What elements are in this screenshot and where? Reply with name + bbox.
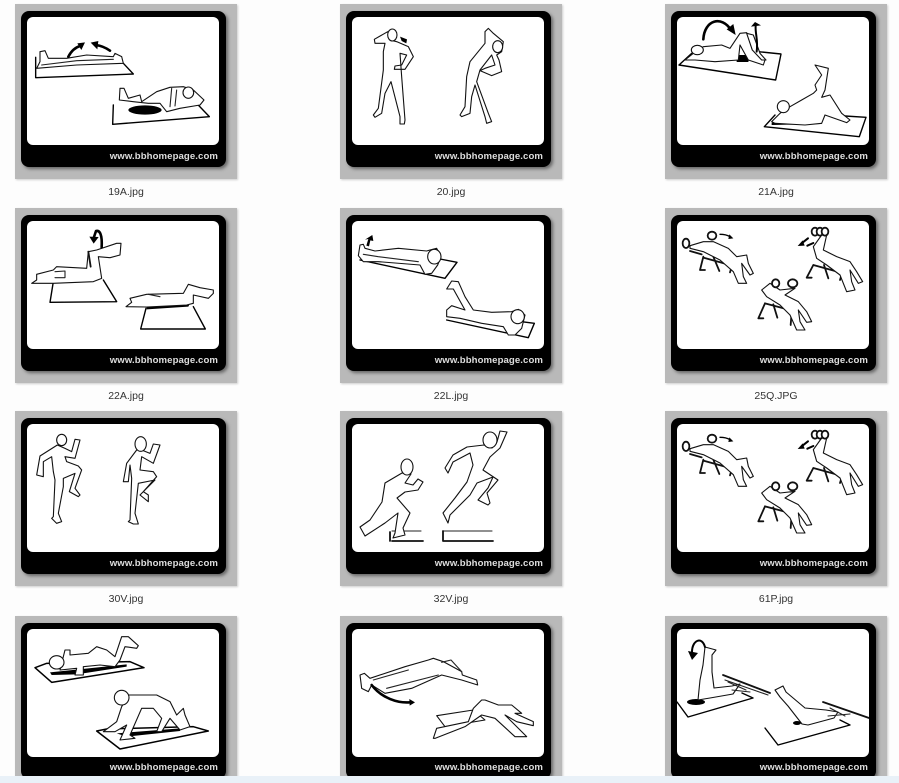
website footer: www.bbhomepage.com <box>110 151 218 162</box>
panel: 21A thumbnail <box>665 4 889 198</box>
black frame <box>671 215 876 371</box>
illustration: dumbbell bench press <box>677 424 869 552</box>
illustration: standing knee raise <box>27 424 219 552</box>
panel: 25Q thumbnail <box>665 208 889 402</box>
black frame <box>346 215 551 371</box>
file label: 25Q.JPG <box>754 390 798 402</box>
panel: row 4 thumbnail, lying spinal twist <box>340 616 564 776</box>
file label: 21A.jpg <box>758 186 794 198</box>
website footer: www.bbhomepage.com <box>435 355 543 366</box>
website footer: www.bbhomepage.com <box>110 762 218 773</box>
website footer: www.bbhomepage.com <box>760 762 868 773</box>
panel: 19A thumbnail <box>15 4 239 198</box>
file label: 30V.jpg <box>109 593 143 605</box>
file label: 22A.jpg <box>108 390 144 402</box>
illustration: alternating leg lift on mat <box>27 221 219 349</box>
black frame <box>346 623 551 779</box>
black frame <box>346 11 551 167</box>
illustration: lying twist <box>352 629 544 757</box>
panel: 20 thumbnail <box>340 4 564 198</box>
website footer: www.bbhomepage.com <box>760 558 868 569</box>
file label: 22L.jpg <box>434 390 468 402</box>
black frame <box>21 623 226 779</box>
illustration: dumbbell bench press <box>677 221 869 349</box>
website footer: www.bbhomepage.com <box>110 355 218 366</box>
black frame <box>21 418 226 574</box>
illustration: standing side bend <box>352 17 544 145</box>
file label: 19A.jpg <box>108 186 144 198</box>
website footer: www.bbhomepage.com <box>435 762 543 773</box>
black frame <box>671 11 876 167</box>
file label: 20.jpg <box>437 186 465 198</box>
panel: 32V thumbnail <box>340 411 564 605</box>
file label: 61P.jpg <box>759 593 793 605</box>
black frame <box>21 215 226 371</box>
illustration: step sprint <box>352 424 544 552</box>
black frame <box>671 623 876 779</box>
panel: 30V thumbnail <box>15 411 239 605</box>
illustration: lying knee and leg raise <box>677 17 869 145</box>
file label: 32V.jpg <box>434 593 468 605</box>
website footer: www.bbhomepage.com <box>760 151 868 162</box>
website footer: www.bbhomepage.com <box>435 151 543 162</box>
panel: row 4 thumbnail, vertical leg raise with rod <box>665 616 889 776</box>
website footer: www.bbhomepage.com <box>760 355 868 366</box>
black frame <box>21 11 226 167</box>
black frame <box>346 418 551 574</box>
panel: 22L thumbnail <box>340 208 564 402</box>
black frame <box>671 418 876 574</box>
bottom window strip <box>0 776 899 783</box>
illustration: lying leg slide exercise <box>27 17 219 145</box>
illustration: seated leg raise with rod <box>677 629 869 757</box>
panel: row 4 thumbnail, prone and all fours <box>15 616 239 776</box>
illustration: prone rest and all fours <box>27 629 219 757</box>
website footer: www.bbhomepage.com <box>435 558 543 569</box>
website footer: www.bbhomepage.com <box>110 558 218 569</box>
illustration: prone leg lift <box>352 221 544 349</box>
panel: 22A thumbnail <box>15 208 239 402</box>
panel: 61P thumbnail <box>665 411 889 605</box>
